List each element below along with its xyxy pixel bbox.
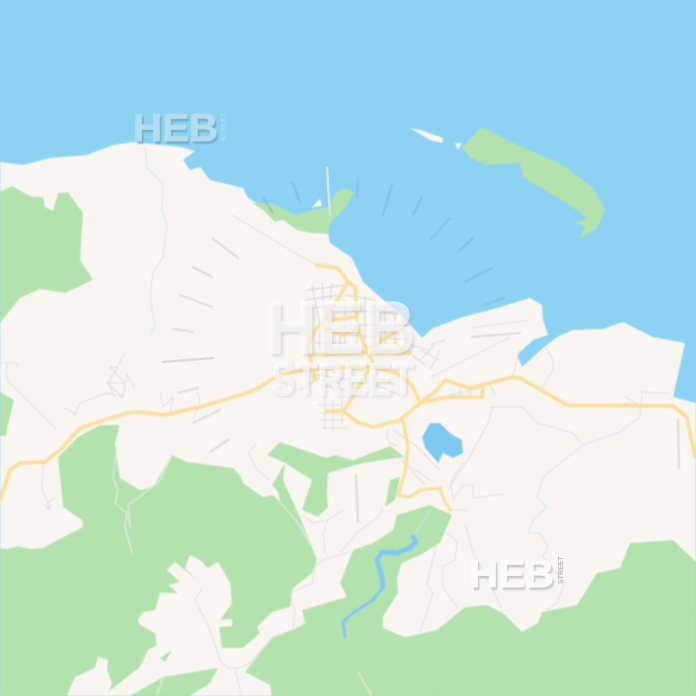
tall streak [327, 168, 330, 215]
watermark: bottom right: HEB [469, 553, 554, 596]
white bar [163, 358, 213, 362]
forest: central band [267, 442, 405, 517]
watermark: centre: HEB [268, 289, 418, 372]
watermark: top left: STREET [221, 113, 228, 141]
forest: tongue [160, 650, 172, 662]
suburb streets [63, 340, 495, 485]
watermark: centre: STREET [273, 355, 416, 407]
island: small [410, 128, 443, 143]
land streaks [173, 238, 679, 522]
watermark: centre [265, 286, 418, 407]
town street grid [300, 282, 430, 395]
highway [0, 367, 695, 500]
forest: south strip [130, 668, 218, 696]
streams in forest [113, 450, 372, 696]
sea streaks [263, 178, 503, 305]
watermark: centre: STREET [271, 353, 414, 405]
minor roads [0, 215, 553, 696]
island: green [462, 127, 605, 238]
watermark: top left: HEB [135, 110, 220, 153]
watermark: top left: HEB [133, 107, 218, 150]
river [343, 537, 416, 637]
peninsula white spot [312, 199, 322, 207]
forest: south east [245, 505, 696, 696]
peninsula forest [252, 188, 354, 234]
watermark streaks [163, 168, 679, 522]
watermark: bottom right: HEB [471, 556, 556, 599]
forest: west edge [0, 392, 14, 436]
faint forest streams [285, 540, 696, 696]
town roads [308, 265, 410, 412]
south loop [327, 388, 483, 427]
watermark: bottom right: STREET [558, 556, 565, 584]
southern road [398, 420, 450, 510]
streams [145, 147, 670, 610]
forest: small patch [385, 477, 400, 507]
forest: south west [0, 425, 317, 696]
mainland [0, 142, 696, 696]
island: white dot [455, 143, 462, 150]
forest: west [0, 186, 93, 323]
lake [422, 423, 463, 463]
watermark: centre: HEB [265, 286, 415, 369]
main roads [0, 265, 695, 510]
